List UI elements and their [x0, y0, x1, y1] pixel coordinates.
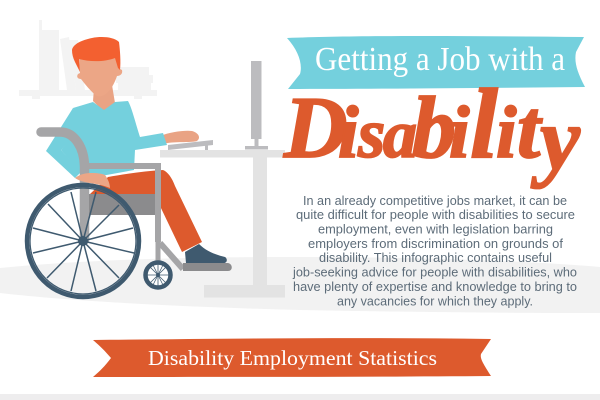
title: Disability: s	[357, 96, 385, 173]
title: Disability: i	[449, 92, 470, 174]
section heading: Disability Employment Statistics	[148, 346, 437, 370]
intro paragraph: disability. This infographic contains useful	[319, 251, 552, 265]
icon: head	[77, 56, 122, 96]
icon: neck	[93, 85, 115, 112]
title: Disability: t	[517, 83, 543, 176]
icon: bookshelf	[19, 20, 157, 99]
intro paragraph: quite difficult for people with disabilities to secure	[296, 208, 575, 222]
icon: torso and arms	[61, 101, 167, 178]
icon: large wheel	[27, 185, 139, 297]
icon: leg	[90, 170, 202, 252]
intro paragraph: job-seeking advice for people with disabilities, who	[292, 266, 577, 280]
title line: Getting a Job with a: Getting a Job with a	[315, 41, 565, 78]
icon: desk	[160, 150, 285, 298]
title: Disability: a	[383, 96, 417, 172]
icon: keyboard	[168, 140, 213, 150]
icon: hand on wheel	[75, 173, 110, 188]
intro paragraph	[292, 194, 577, 308]
title: Disability: i	[338, 92, 359, 174]
section banner	[93, 338, 491, 377]
intro paragraph: employers from discrimination on grounds of	[308, 237, 564, 251]
title: Disability: i	[496, 92, 517, 174]
icon: computer monitor	[245, 61, 268, 150]
intro paragraph: any vacancies for which they apply.	[337, 294, 533, 308]
title: Disability: b	[412, 80, 456, 177]
icon: seat	[89, 194, 155, 215]
bottom strip	[0, 394, 600, 400]
floor ellipse	[0, 257, 600, 313]
title banner	[287, 36, 585, 89]
icon: footrest	[183, 263, 232, 271]
title: Disability: y	[530, 90, 581, 189]
icon: wheelchair frame	[41, 132, 183, 269]
icon: wheelchair upright	[155, 163, 161, 242]
title: Disability: D	[283, 80, 348, 177]
intro paragraph: In an already competitive jobs market, it can be	[303, 194, 567, 208]
intro paragraph: have plenty of expertise and knowledge to bring to	[293, 280, 577, 294]
icon: hair	[72, 37, 120, 72]
title: Disability: l	[470, 68, 498, 179]
icon: shoe	[185, 244, 227, 263]
icon: small wheel	[146, 262, 170, 288]
icon: forearm and hand	[160, 131, 199, 144]
intro paragraph: employment, even with legislation barring	[318, 222, 553, 236]
person in wheelchair	[27, 37, 232, 297]
